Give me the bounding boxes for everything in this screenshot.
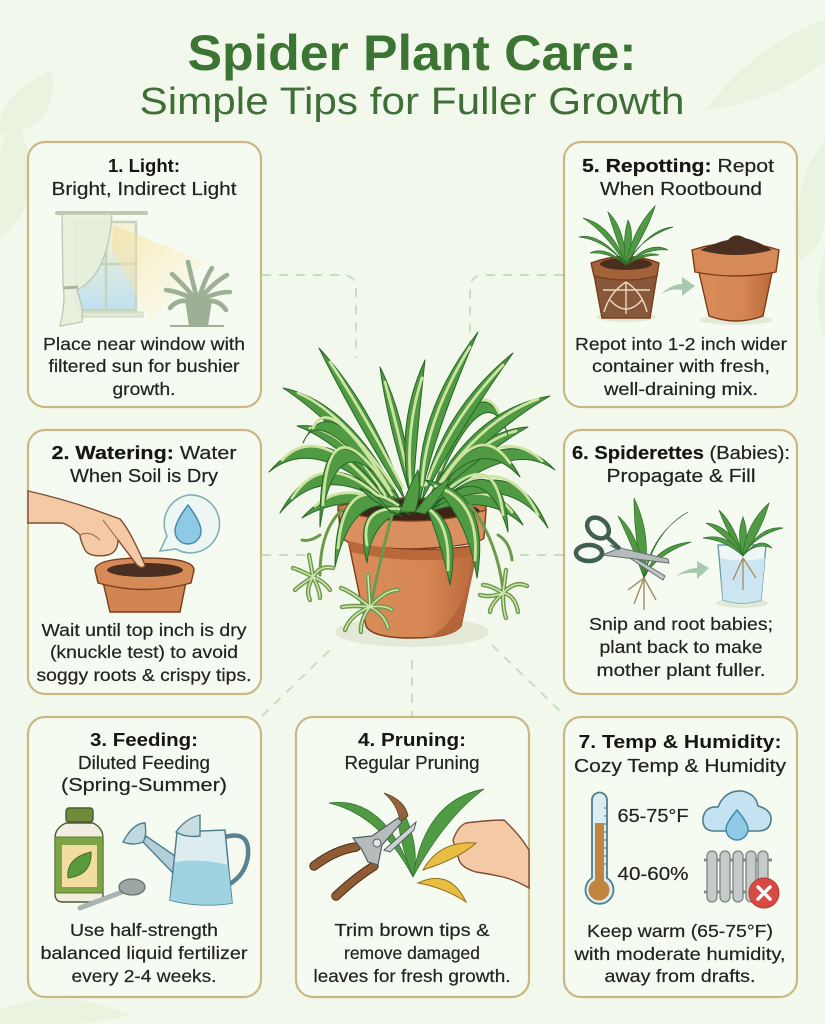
heading <box>52 443 237 486</box>
heading <box>574 732 786 776</box>
body text: soggy roots & crispy tips. <box>36 665 252 685</box>
icon: window with curtain <box>55 211 148 326</box>
icon: hand finger test <box>28 491 145 568</box>
body text: Snip and root babies; <box>589 614 773 634</box>
heading: 1. Light: <box>108 156 180 176</box>
connector: spiderettes card to plant <box>520 554 563 556</box>
icon: radiator with cross <box>704 851 779 908</box>
heading <box>572 443 790 486</box>
body text: Wait until top inch is dry <box>42 620 247 640</box>
body text <box>573 921 786 986</box>
body text <box>314 920 510 986</box>
title: Simple Tips for Fuller Growth <box>140 81 684 123</box>
body text: away from drafts. <box>604 966 756 986</box>
range labels: 65-75°F <box>618 806 689 826</box>
terracotta pot <box>338 498 486 638</box>
icon: humidity cloud <box>703 791 771 840</box>
icon: fertilizer bottle <box>55 808 103 902</box>
body text: Trim brown tips & <box>334 920 490 940</box>
connector: temp card to plant <box>492 645 565 716</box>
panel: 5 repotting <box>564 142 797 407</box>
range labels <box>618 806 689 884</box>
heading: 4. Pruning: <box>358 730 466 750</box>
icon: plant in water glass <box>703 503 783 608</box>
body text: well-draining mix. <box>603 379 758 399</box>
heading: When Soil is Dry <box>70 466 218 486</box>
body text: plant back to make <box>600 637 762 657</box>
connector: watering card to plant <box>262 554 305 556</box>
body text: balanced liquid fertilizer <box>40 943 248 963</box>
body text: growth. <box>112 379 176 399</box>
heading <box>52 156 236 199</box>
arrow <box>676 561 709 579</box>
panel: 2 watering <box>28 430 261 694</box>
icon: larger pot <box>692 235 779 325</box>
central spider plant <box>269 332 555 647</box>
body text: with moderate humidity, <box>573 944 786 964</box>
body text <box>36 620 252 685</box>
title <box>140 25 684 123</box>
heading <box>344 730 480 773</box>
icon: sun rays <box>112 225 205 320</box>
heading: 7. Temp & Humidity: <box>578 732 782 752</box>
icon: baby plant cutting <box>618 498 691 610</box>
body text: Use half-strength <box>70 920 218 940</box>
icon: thermometer <box>586 793 613 904</box>
connector: pruning card to plant <box>411 660 413 716</box>
icon: hand holding yellow leaf <box>418 820 529 902</box>
icon: plant silhouette <box>166 262 230 326</box>
body text: Repot into 1-2 inch wider <box>575 334 787 354</box>
panel: 3 feeding <box>28 717 261 997</box>
icon: pot with soil <box>95 558 194 612</box>
icon: measuring spoon <box>80 879 145 908</box>
body text: (knuckle test) to avoid <box>50 642 238 662</box>
connector: light card to plant <box>262 275 356 358</box>
heading <box>61 730 227 795</box>
heading: (Spring-Summer) <box>61 775 227 795</box>
panel: 4 pruning <box>296 717 529 997</box>
heading: 6. Spiderettes (Babies): <box>572 443 790 463</box>
heading: Diluted Feeding <box>78 753 210 773</box>
icon: watering can <box>123 815 248 905</box>
heading: 2. Watering: Water <box>52 443 237 463</box>
arrow <box>661 277 695 296</box>
long leaves <box>269 332 555 585</box>
heading <box>582 156 774 199</box>
body text <box>575 334 787 399</box>
body text: filtered sun for bushier <box>48 356 240 376</box>
heading: Cozy Temp & Humidity <box>574 756 786 776</box>
body text: every 2-4 weeks. <box>72 966 216 986</box>
connector: repotting card to plant <box>470 275 563 358</box>
panel: 1 light <box>28 142 261 407</box>
heading: 3. Feeding: <box>90 730 198 750</box>
shadow <box>335 617 489 647</box>
body text <box>43 334 245 399</box>
title: Spider Plant Care: <box>188 25 636 81</box>
body text: Keep warm (65-75°F) <box>587 921 773 941</box>
heading: Regular Pruning <box>344 753 480 773</box>
panel: 6 spiderettes <box>564 430 797 694</box>
body text: Place near window with <box>43 334 245 354</box>
range labels: 40-60% <box>618 864 688 884</box>
icon: green leaves <box>329 789 484 877</box>
connector: feeding card to plant <box>262 645 335 716</box>
heading: When Rootbound <box>600 179 762 199</box>
hanging spiderettes <box>293 505 527 632</box>
heading: Bright, Indirect Light <box>52 179 236 199</box>
icon: rootbound plant <box>579 206 673 322</box>
body text: container with fresh, <box>592 356 770 376</box>
heading: Propagate & Fill <box>606 466 756 486</box>
body text: leaves for fresh growth. <box>314 966 510 986</box>
icon: pruning shears <box>314 818 416 896</box>
icon: scissors <box>576 513 669 580</box>
body text: mother plant fuller. <box>596 660 766 680</box>
body text <box>589 614 773 680</box>
heading: 5. Repotting: Repot <box>582 156 774 176</box>
body text: remove damaged <box>344 943 480 963</box>
body text <box>40 920 248 986</box>
panel: 7 temp and humidity <box>564 717 797 997</box>
icon: water drop bubble <box>160 495 220 553</box>
